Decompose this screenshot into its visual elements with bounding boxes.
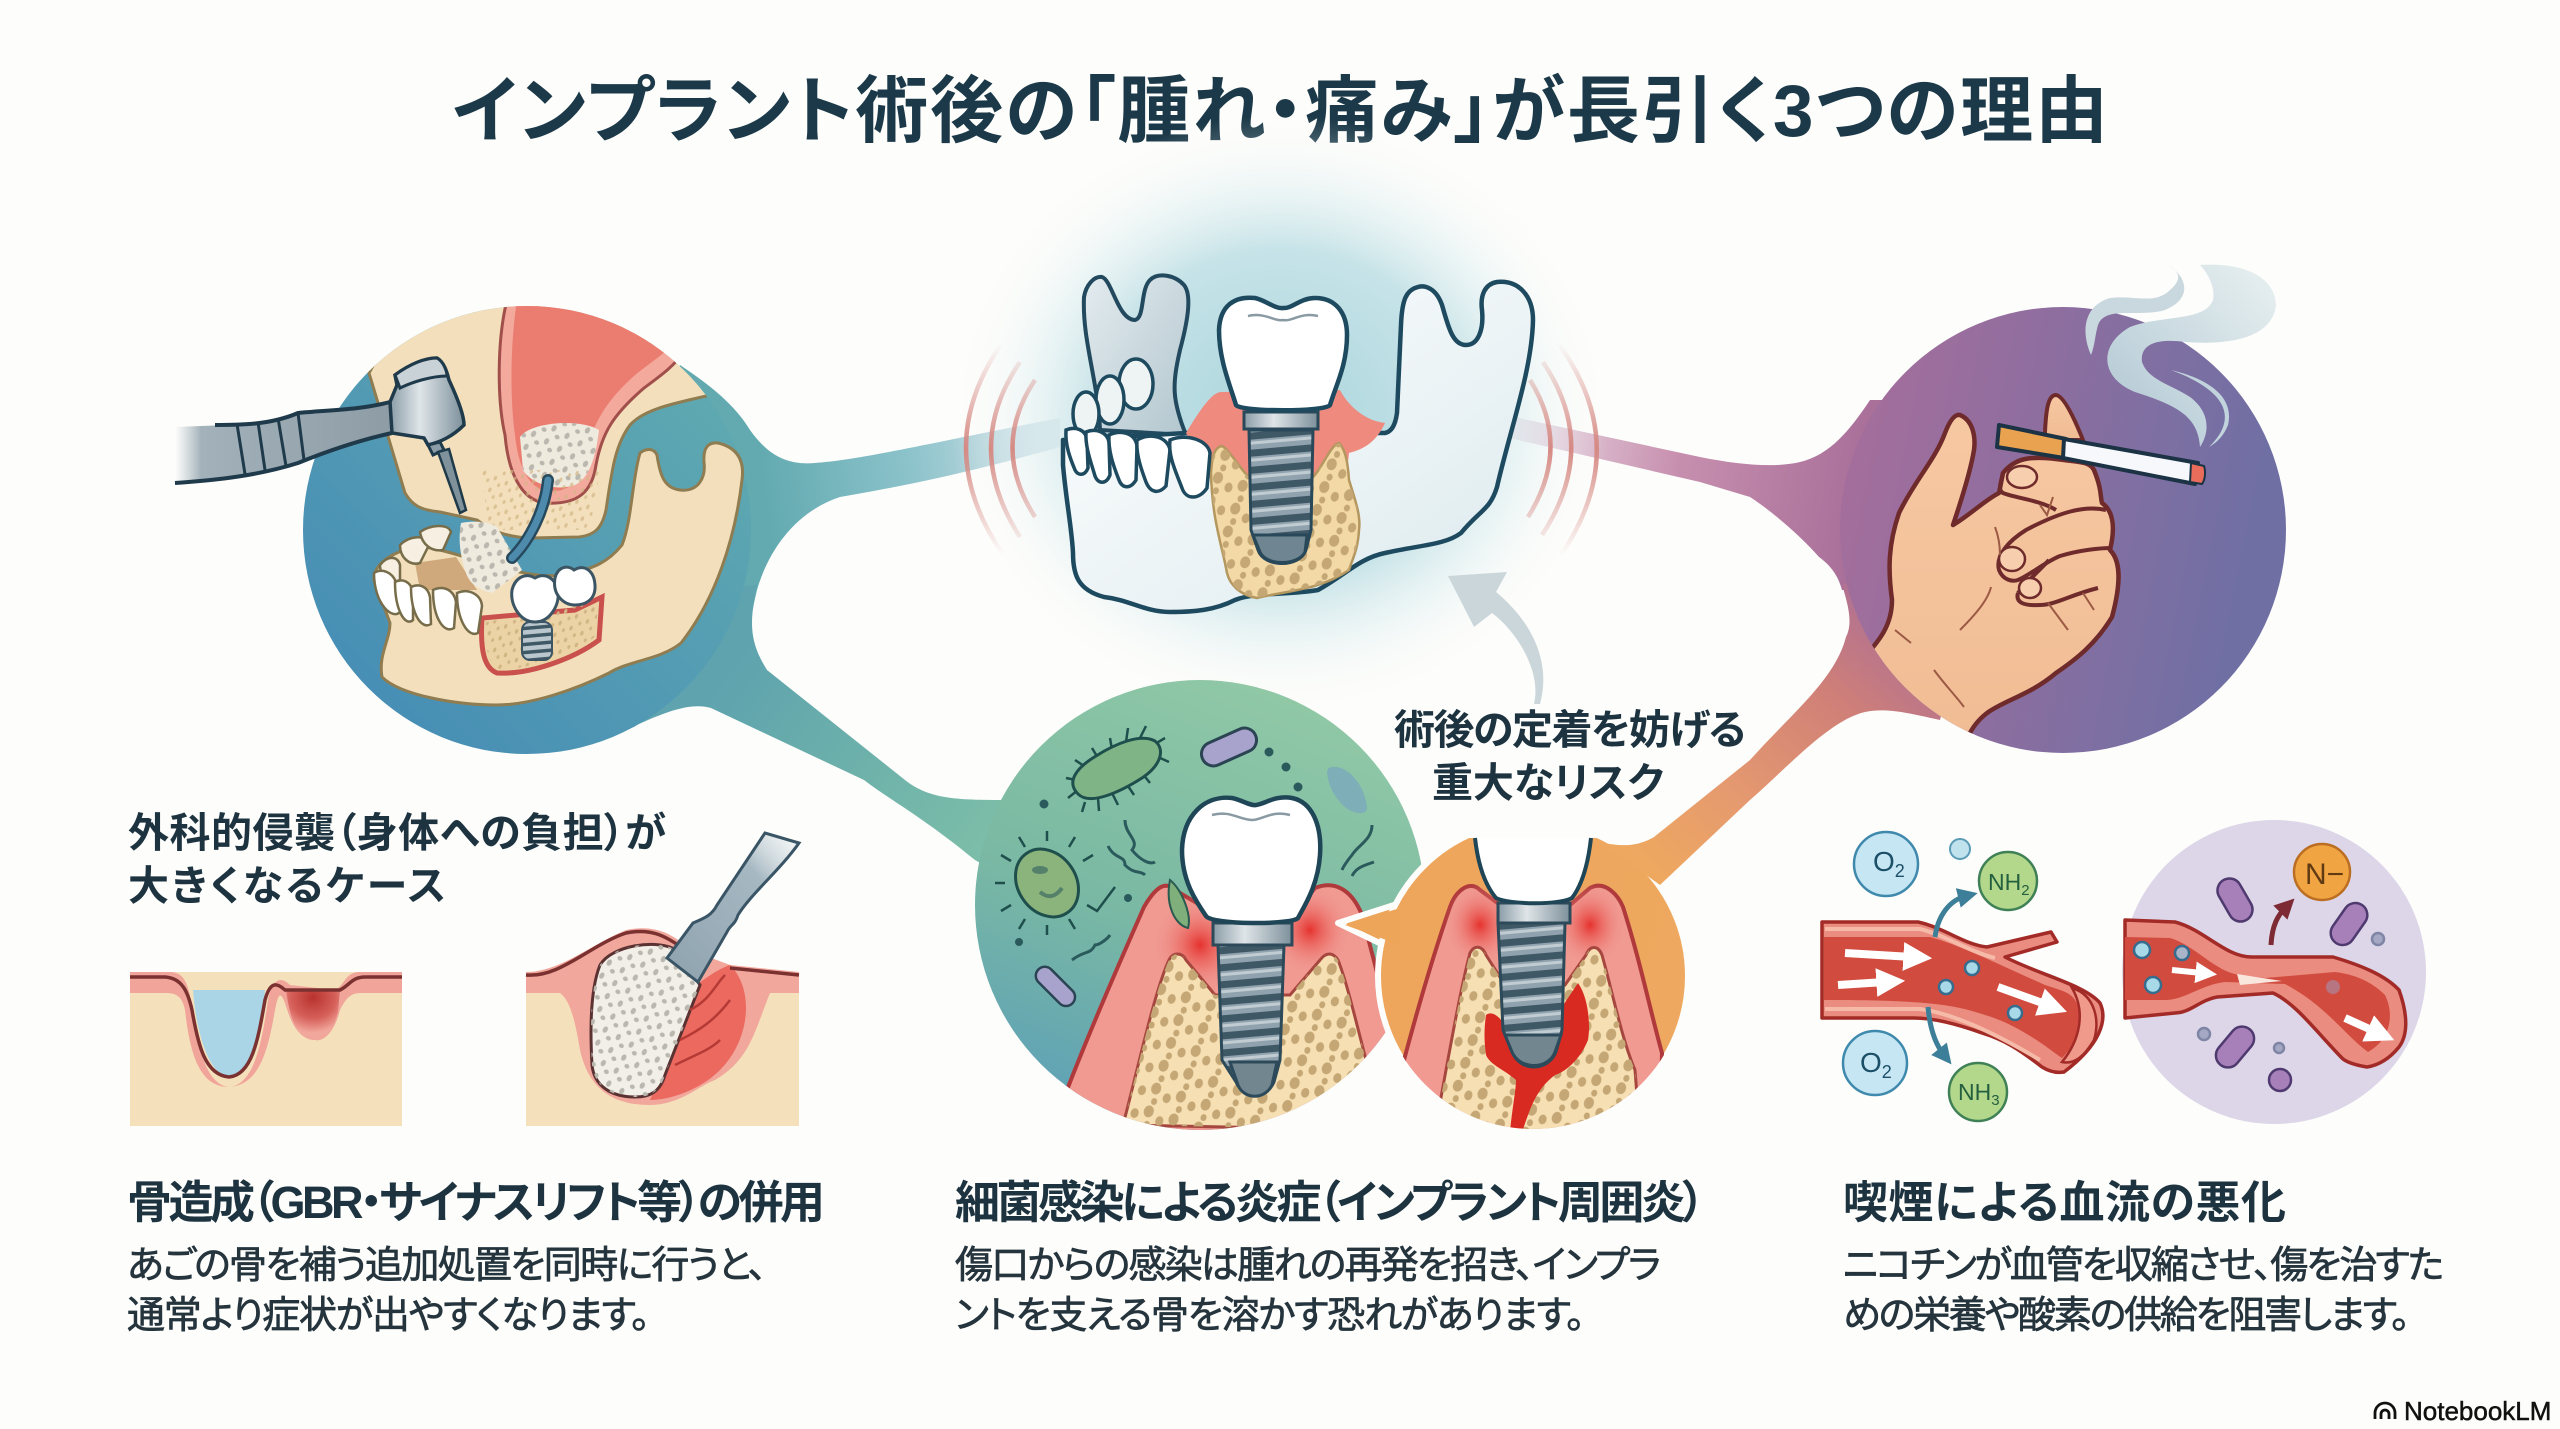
- back ramus: [1084, 275, 1188, 435]
- diagram: simple extraction socket: [130, 972, 402, 1126]
- callout: serious risk text: 術後の定着を妨げる: [1394, 707, 1746, 753]
- text block: bone grafting: 通常より症状が出やすくなります。: [127, 1295, 650, 1337]
- implant screw: [1498, 923, 1565, 1067]
- pointer fill without border: [1345, 908, 1400, 945]
- anterior teeth: [374, 526, 482, 634]
- implant collar: [1498, 903, 1570, 923]
- oxygen and nutrient bubbles: 2: [2021, 882, 2030, 899]
- implant collar: [1244, 412, 1318, 429]
- purple circle: [2122, 820, 2426, 1124]
- heading: [128, 810, 666, 909]
- text block: smoking: 喫煙による血流の悪化: [1843, 1177, 2286, 1228]
- implant collar: [1213, 923, 1292, 945]
- panel: peri-implantitis close-up: [1335, 838, 1685, 1129]
- oxygen and nutrient bubbles: NH: [1958, 1079, 1991, 1105]
- graft tube: [512, 480, 548, 558]
- chisel tool: [667, 833, 799, 982]
- bacterium: round spiky: [995, 831, 1115, 935]
- connector: left circle to centre: [640, 365, 1060, 640]
- connector: smoking to orange: [1600, 560, 1960, 885]
- implant and crowns: [522, 622, 552, 660]
- constricted vessel: [2125, 920, 2406, 1067]
- front teeth: [1066, 428, 1210, 497]
- implant crown: [1182, 797, 1320, 923]
- arrow: curving up to the jaw: [1448, 572, 1543, 704]
- close-up interior: [1404, 883, 1662, 1140]
- purple particles: [2198, 874, 2384, 1091]
- implant screw: [1218, 945, 1284, 1096]
- arrow: nutrient out, lower: [1928, 1007, 1944, 1055]
- oxygen and nutrient bubbles: O: [1873, 846, 1895, 877]
- panel: central jaw with implant: [950, 115, 1610, 715]
- text block: smoking: めの栄養や酸素の供給を阻害します。: [1843, 1295, 2410, 1337]
- infection spread: [1484, 983, 1589, 1132]
- text block: bacterial inflammation: 細菌感染による炎症（インプラント周囲炎）: [955, 1177, 1705, 1228]
- text block: bacterial inflammation: ントを支える骨を溶かす恐れがあります。: [955, 1295, 1585, 1337]
- green plaque on gum: [1169, 880, 1189, 928]
- circle background: [975, 680, 1425, 1130]
- text block: smoking: [1843, 1177, 2444, 1337]
- top cap behind the crown: [1462, 812, 1612, 838]
- pain arcs right: [1528, 343, 1597, 555]
- toxin molecule: N−: [2305, 858, 2344, 891]
- mouth interior: [415, 557, 477, 590]
- implant screw: [1249, 430, 1313, 564]
- callout: serious risk text: 重大なリスク: [1432, 760, 1664, 806]
- gum: [1060, 885, 1400, 1140]
- bacterium: small purple: [1032, 963, 1079, 1010]
- lower jaw body: [1063, 282, 1533, 612]
- back molars: [1073, 359, 1153, 436]
- oxygen and nutrient bubbles: O: [1860, 1047, 1882, 1078]
- callout pointer: [1338, 905, 1394, 950]
- implant socket: [482, 597, 602, 673]
- oxygen and nutrient bubbles: 3: [1991, 1092, 2000, 1109]
- diagram: bone graft socket: [526, 833, 799, 1126]
- bone: [1123, 954, 1385, 1130]
- oxygen and nutrient bubbles: 2: [1895, 861, 1905, 881]
- text block: bacterial inflammation: [955, 1177, 1705, 1337]
- text block: bone grafting: [127, 1177, 825, 1337]
- bacterium: purple rod: [1198, 724, 1260, 770]
- cigarette: [1997, 425, 2205, 484]
- panel: surgical invasion circle: [175, 280, 760, 754]
- heading: 外科的侵襲（身体への負担）が: [128, 810, 666, 856]
- connector: left circle to infection circle: [600, 585, 1010, 880]
- smoke: [2085, 265, 2276, 447]
- toxin molecule: [2294, 844, 2350, 900]
- implant crown: [1475, 838, 1591, 903]
- title: インプラント術後の「腫れ・痛み」が長引く3つの理由: [452, 71, 2108, 152]
- infection interior: [1060, 885, 1400, 1140]
- text block: bacterial inflammation: 傷口からの感染は腫れの再発を招き、インプラ: [955, 1245, 1661, 1287]
- implant crown: [1219, 298, 1347, 410]
- connector: centre to right circle: [1505, 400, 1920, 590]
- oxygen and nutrient bubbles: 2: [1882, 1062, 1892, 1082]
- handpiece: [175, 358, 466, 513]
- bone cross-section: [1211, 443, 1359, 598]
- upper jaw and sinus: [368, 306, 708, 540]
- circle background: [303, 306, 751, 754]
- circle background: [1840, 307, 2286, 753]
- arrow: toxin up: [2271, 907, 2286, 945]
- finger outlines: [2000, 473, 2056, 510]
- panel: surgical load cases: [128, 810, 799, 1126]
- connector network linking the panels: [600, 365, 1920, 880]
- squiggles and dots: [1016, 749, 1374, 960]
- text block: bone grafting: 骨造成（GBR・サイナスリフト等）の併用: [127, 1177, 825, 1228]
- oxygen and nutrient bubbles: NH: [1988, 869, 2021, 895]
- hand: [1872, 393, 2121, 734]
- bacterium: spiky rod: [1066, 726, 1169, 812]
- gum: [1186, 390, 1385, 490]
- panel: bacterial infection circle: [975, 680, 1425, 1140]
- text block: bone grafting: あごの骨を補う追加処置を同時に行うと、: [127, 1245, 767, 1287]
- healthy vessel: [1822, 922, 2103, 1072]
- graft block: [460, 522, 522, 593]
- bacterium: grey bean: [1332, 772, 1362, 808]
- lower jaw: [374, 443, 743, 705]
- heading: 大きくなるケース: [128, 863, 446, 909]
- watermark: NotebookLM: NotebookLM: [2404, 1396, 2551, 1426]
- pain arcs left: [966, 343, 1035, 553]
- text block: smoking: ニコチンが血管を収縮させ、傷を治すた: [1843, 1245, 2444, 1287]
- oxygen and nutrient bubbles: [1843, 832, 2037, 1121]
- circle background: [1378, 821, 1688, 1131]
- blue glow: [950, 115, 1610, 715]
- panel: blood vessel comparison: [1822, 820, 2426, 1124]
- panel: smoking circle: [1600, 265, 2286, 885]
- callout: serious risk text: [1394, 707, 1746, 806]
- arrow: nutrient out, upper: [1935, 896, 1966, 937]
